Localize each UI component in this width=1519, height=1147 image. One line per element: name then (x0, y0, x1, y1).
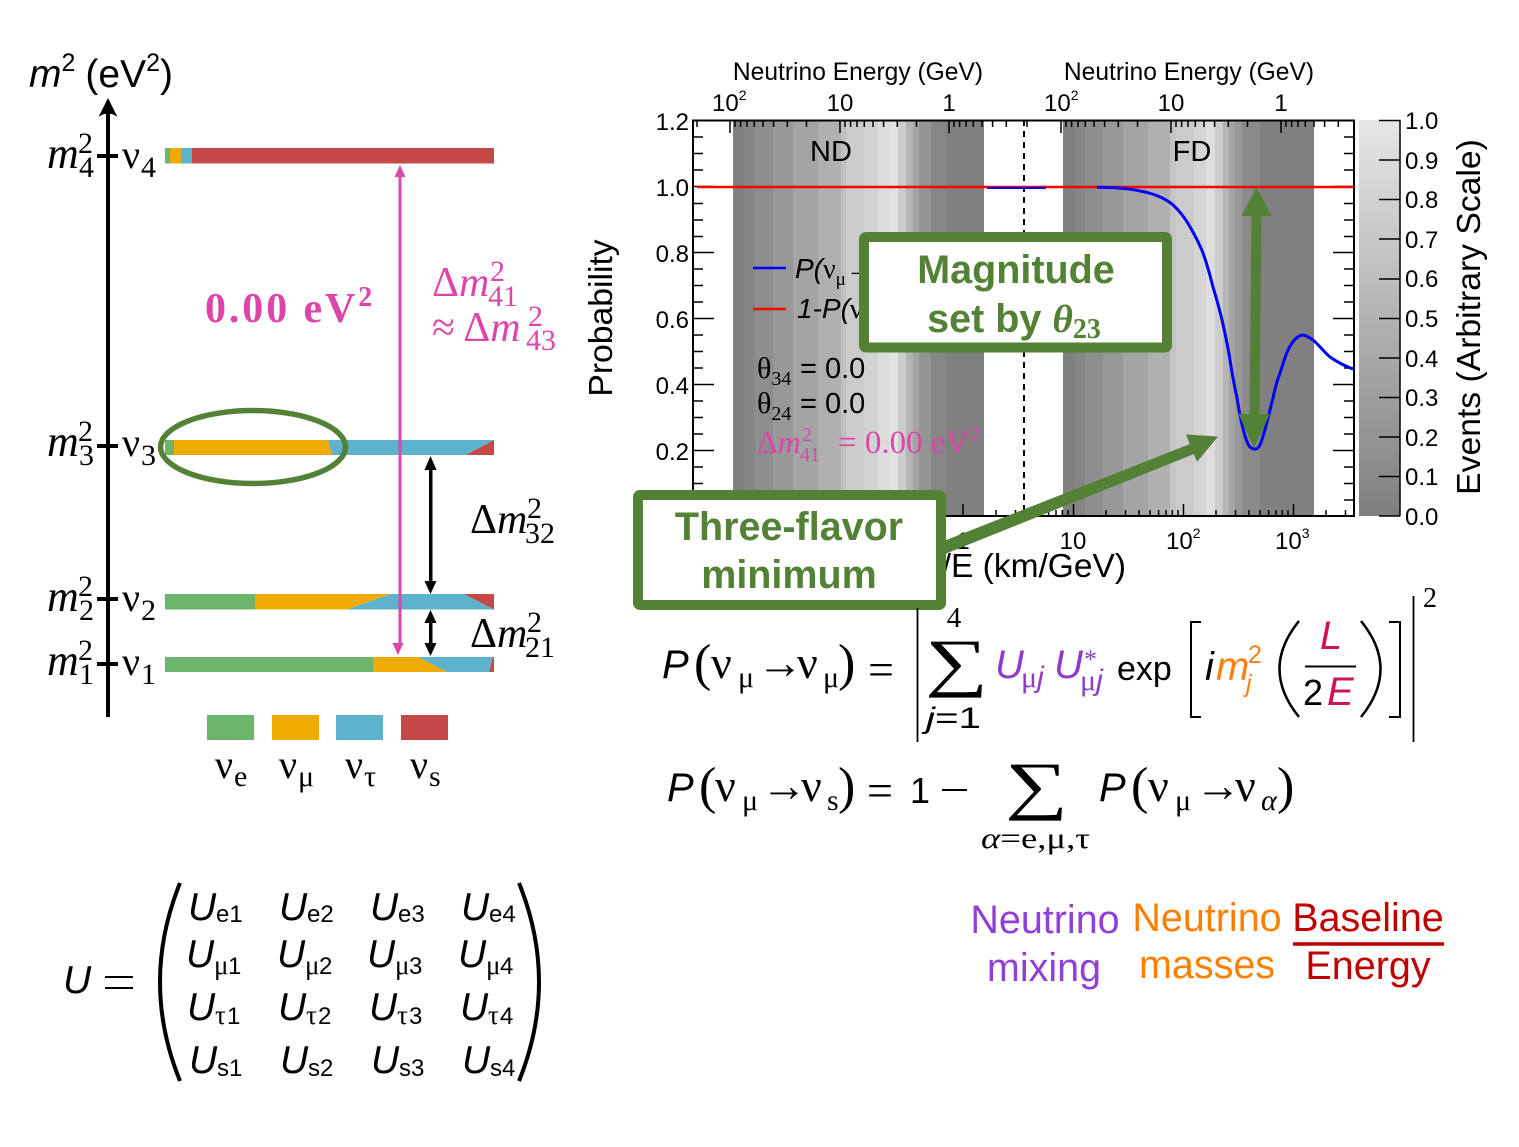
color bar: events arbitrary scale: 0.0 (1405, 504, 1438, 531)
equation: PMNS mixing matrix: U (371, 1039, 400, 1082)
label: dm41 approx dm43: 43 (526, 324, 556, 357)
label: m4 and nu4: 4 (79, 151, 94, 184)
legend: neutrino flavors: e (234, 760, 247, 793)
label: m4 and nu4: 2 (78, 127, 93, 160)
shaded band: FD event spectrum (1063, 120, 1314, 516)
top axis tick labels: 2 (1071, 87, 1079, 103)
equation: muon neutrino survival probability: U (995, 643, 1025, 687)
equation: muon neutrino survival probability: 2 (1248, 641, 1262, 669)
equation: PMNS mixing matrix: U (460, 986, 489, 1029)
detector label: FD: FD (1173, 136, 1211, 168)
legend: neutrino flavors: ν (410, 742, 428, 787)
callout: three-flavor minimum: minimum (701, 553, 877, 597)
parameters text: 24 (771, 403, 791, 425)
equation: sterile appearance probability: ∑ (1005, 749, 1068, 821)
equation: PMNS mixing matrix: 3 (409, 1003, 422, 1030)
highlight ellipse around nu3 muon content (160, 410, 346, 484)
bottom axis tick labels: 2 (1193, 525, 1201, 541)
equation: muon neutrino survival probability: exp (1117, 650, 1172, 688)
parameters text: θ (757, 352, 771, 385)
equation: muon neutrino survival probability: ∑ (925, 626, 988, 698)
equation: sterile appearance probability: ) (838, 758, 855, 815)
equation: PMNS mixing matrix: τ (215, 1000, 226, 1030)
equation: PMNS mixing matrix: e2 (307, 901, 334, 928)
color bar: events arbitrary scale: 0.7 (1405, 227, 1438, 254)
y axis tick labels (656, 109, 689, 466)
equation: sterile appearance probability: ν (715, 760, 736, 811)
color bar: events arbitrary scale: 0.9 (1405, 148, 1438, 175)
y axis tick labels: 0.8 (656, 241, 689, 268)
label: dm41 approx dm43: 2 (528, 300, 543, 333)
equation: PMNS mixing matrix: e4 (489, 901, 516, 928)
label: dm21: Δm (470, 611, 527, 657)
equation: PMNS mixing matrix: s3 (399, 1055, 424, 1082)
label: m3 and nu3: 3 (79, 439, 94, 472)
label: m3 and nu3: 3 (141, 439, 156, 472)
annotation: three-flavor arrow (936, 434, 1218, 556)
top axis tick labels: 10 (712, 90, 739, 117)
color bar: events arbitrary scale: 0.4 (1405, 346, 1438, 373)
label: m1 and nu1: 1 (141, 658, 156, 691)
shaded band: ND event spectrum (733, 120, 984, 516)
line: ND survival blue curve (987, 187, 1046, 189)
equation: PMNS mixing matrix: U (186, 933, 215, 976)
arrow: dm32 (424, 456, 436, 594)
legend: neutrino masses (1132, 896, 1282, 987)
equation: muon neutrino survival probability: L (1320, 614, 1342, 658)
equation: muon neutrino survival probability: 2 (1423, 583, 1437, 614)
equation: PMNS mixing matrix: e3 (398, 901, 425, 928)
y axis tick labels: 1.0 (656, 175, 689, 202)
callout: magnitude set by theta23: Magnitude (917, 248, 1115, 292)
equation: muon neutrino survival probability: μj (1021, 661, 1045, 694)
color bar: events arbitrary scale: 0.6 (1405, 266, 1438, 293)
color bar: events arbitrary scale: 0.8 (1405, 187, 1438, 214)
equation: muon neutrino survival probability: U (1054, 643, 1084, 687)
equation: sterile appearance probability: P (1099, 766, 1126, 810)
legend: neutrino masses: masses (1139, 943, 1275, 987)
color bar title: Events (Arbitrary Scale) (1450, 139, 1488, 495)
equation: sterile appearance probability: ( (699, 758, 716, 815)
equation: sterile appearance probability: ) (1277, 758, 1294, 815)
equation: muon neutrino survival probability: j (1243, 670, 1253, 698)
top axis title: ND energy: Neutrino Energy (GeV) (733, 59, 983, 86)
equation: muon neutrino survival probability: → (757, 637, 803, 688)
legend: baseline over energy: Energy (1305, 944, 1431, 988)
equation: PMNS mixing matrix: 4 (500, 1003, 513, 1030)
label: m3 and nu3: 2 (78, 415, 93, 448)
equation: PMNS mixing matrix: 3 (409, 953, 422, 980)
equation: muon neutrino survival probability: ν (797, 637, 818, 688)
label: dm41 approx dm43: Δm (432, 260, 489, 306)
axis title: m squared in eV squared: 2 (146, 49, 160, 77)
equation: sterile appearance probability: ( (1131, 758, 1148, 815)
arrow: pink mass splitting (392, 165, 406, 655)
equation: sterile appearance probability: ν (1235, 760, 1256, 811)
equation: muon neutrino survival probability: ( (694, 635, 711, 692)
panel: neutrino mass spectrum (29, 49, 556, 793)
equation: PMNS mixing matrix: μ (305, 950, 319, 980)
legend: neutrino mixing: Neutrino (970, 898, 1120, 942)
arrow: dm21 (424, 610, 436, 656)
equation: PMNS mixing matrix: s1 (217, 1055, 242, 1082)
label: dm21: 21 (525, 631, 555, 664)
equation: sterile appearance probability: α=e,μ,τ (981, 822, 1090, 855)
label: dm21 (470, 606, 555, 664)
legend: neutrino flavors: ν (215, 742, 233, 787)
axis title: m squared in eV squared: ) (160, 53, 173, 96)
parameters text (757, 352, 979, 466)
equation: PMNS mixing matrix: τ (397, 1000, 408, 1030)
parameters text: 2 (802, 424, 812, 446)
bar: nu4 flavor content (165, 148, 494, 164)
equation: PMNS mixing matrix: U (461, 886, 490, 929)
callout: magnitude set by theta23: set by θ (927, 297, 1073, 341)
color bar: events arbitrary scale: 0.5 (1405, 306, 1438, 333)
legend: neutrino flavors (207, 715, 448, 793)
bar: nu2 flavor content (165, 594, 494, 610)
top axis title: FD energy: Neutrino Energy (GeV) (1064, 59, 1314, 86)
legend: neutrino flavors: μ (298, 760, 314, 793)
chart legend: →ν (846, 253, 888, 284)
axis title: m squared in eV squared: 2 (62, 49, 75, 77)
legend: baseline over energy (1292, 896, 1444, 988)
equation: muon neutrino survival probability: * (1084, 645, 1097, 674)
equation: PMNS mixing matrix: U (369, 986, 398, 1029)
equation: muon neutrino survival probability: P (662, 643, 689, 687)
equation: PMNS mixing matrix: U (279, 886, 308, 929)
parameters text: 34 (771, 368, 791, 390)
equation: sterile appearance probability: 1 (910, 770, 930, 811)
chart legend (753, 253, 888, 325)
equation: sterile appearance probability: α (1261, 784, 1278, 817)
label: m1 and nu1: 2 (78, 634, 93, 667)
parameters text: 2 (969, 423, 979, 445)
equation: PMNS mixing matrix: 2 (318, 1003, 331, 1030)
equation: muon neutrino survival probability (662, 583, 1437, 742)
color bar: events arbitrary scale: 0.1 (1405, 464, 1438, 491)
top axis tick labels (712, 87, 1288, 117)
label: m2 and nu2 (47, 570, 156, 627)
legend: neutrino flavors: s (429, 760, 441, 793)
parameters text: = 0.00 eV (838, 425, 969, 461)
parameters text: θ (757, 387, 771, 420)
callout: magnitude set by theta23 (864, 237, 1167, 348)
top axis tick labels: 1 (1274, 90, 1288, 117)
x axis title: L/E (km/GeV) (923, 548, 1126, 585)
equation: sterile appearance probability: μ (742, 784, 758, 817)
label: dm21: 2 (527, 606, 542, 639)
equation: PMNS mixing matrix: U (187, 986, 216, 1029)
equation: PMNS mixing matrix: μ (486, 950, 500, 980)
label: m2 and nu2: ν (122, 575, 140, 620)
dashed divider between ND and FD (1023, 120, 1025, 516)
equation: sterile appearance probability: P (667, 766, 694, 810)
parameters text: Δm (757, 424, 801, 460)
label: m2 and nu2: 2 (79, 594, 94, 627)
label: m3 and nu3 (47, 415, 156, 472)
parameters text: 41 (800, 444, 820, 466)
equation: PMNS mixing matrix: 4 (500, 953, 513, 980)
label: m1 and nu1 (47, 634, 156, 691)
equation: PMNS mixing matrix: U (277, 933, 306, 976)
parameters text: = 0.0 (800, 388, 865, 420)
label: m3 and nu3: m (47, 417, 79, 466)
legend: neutrino flavors: ν (279, 742, 297, 787)
equation: sterile appearance probability: → (1195, 760, 1241, 811)
color bar: events arbitrary scale: 1.0 (1405, 108, 1438, 135)
equation: PMNS mixing matrix: U (188, 886, 217, 929)
y axis tick labels: 0.6 (656, 307, 689, 334)
equation: PMNS mixing matrix (63, 883, 539, 1082)
equation: PMNS mixing matrix: U (63, 959, 92, 1002)
equation: muon neutrino survival probability: μ (823, 661, 839, 694)
equation: muon neutrino survival probability: ν (711, 637, 732, 688)
parameters text: = 0.0 (800, 353, 865, 385)
equation: PMNS mixing matrix: U (189, 1039, 218, 1082)
equation: PMNS mixing matrix: s2 (308, 1055, 333, 1082)
detector label: ND: ND (810, 136, 852, 168)
color bar: events arbitrary scale (1359, 108, 1438, 531)
equation: PMNS mixing matrix: 1 (228, 953, 241, 980)
label: m2 and nu2: m (47, 572, 79, 621)
equation: muon neutrino survival probability: μj (1080, 664, 1104, 697)
callout: magnitude set by theta23: 23 (1073, 314, 1101, 345)
bottom axis tick labels: 10 (1060, 528, 1086, 555)
label: m2 and nu2: 2 (78, 570, 93, 603)
legend: neutrino flavors: ν (345, 742, 363, 787)
equation: PMNS mixing matrix: μ (214, 950, 228, 980)
value: 0.00 eV squared: 2 (358, 282, 375, 313)
label: m4 and nu4: ν (122, 132, 140, 177)
equation: sterile appearance probability: = (867, 765, 893, 816)
equation: muon neutrino survival probability: 4 (947, 602, 962, 634)
equation: muon neutrino survival probability: i (1205, 645, 1215, 689)
equation: sterile appearance probability: ν (1148, 760, 1169, 811)
equation: PMNS mixing matrix: U (370, 886, 399, 929)
chart legend: μ (836, 269, 846, 290)
equation: PMNS mixing matrix: U (458, 933, 487, 976)
line: FD survival blue curve (1097, 187, 1353, 449)
bottom axis tick labels: 3 (1302, 525, 1310, 541)
label: m4 and nu4: 4 (141, 151, 156, 184)
legend: baseline over energy: Baseline (1292, 896, 1444, 940)
equation: PMNS mixing matrix: U (280, 1039, 309, 1082)
annotation: magnitude arrow (1238, 187, 1272, 448)
value: 0.00 eV squared: 0.00 eV (205, 286, 358, 332)
equation: sterile appearance probability: → (761, 760, 807, 811)
equation: PMNS mixing matrix: s4 (490, 1055, 515, 1082)
top axis tick labels: 2 (739, 87, 747, 103)
equation: PMNS mixing matrix: U (278, 986, 307, 1029)
equation: PMNS mixing matrix: μ (395, 950, 409, 980)
y axis tick labels: 0.4 (656, 373, 689, 400)
legend: neutrino mixing: mixing (987, 946, 1101, 990)
callout: three-flavor minimum: Three-flavor (675, 505, 903, 549)
label: m2 and nu2: 2 (141, 594, 156, 627)
label: dm32: Δm (470, 497, 527, 543)
top axis tick labels: 1 (942, 90, 956, 117)
chart legend: P(ν (795, 253, 836, 285)
line: 1-P red curve (697, 186, 1354, 188)
label: dm32 (470, 492, 555, 550)
label: m1 and nu1: m (47, 636, 79, 685)
label: dm41 approx dm43: 2 (490, 255, 505, 288)
axis ticks (97, 156, 118, 664)
equation: PMNS mixing matrix: e1 (216, 901, 243, 928)
chart legend: 1-P(ν (797, 293, 863, 325)
bottom axis tick labels (956, 525, 1310, 555)
label: dm32: 32 (525, 517, 555, 550)
y axis tick labels: 1.2 (656, 109, 689, 136)
equation: PMNS mixing matrix: 1 (227, 1003, 240, 1030)
bottom axis tick labels: 1 (956, 528, 970, 555)
top axis tick labels: 10 (1158, 90, 1184, 117)
equation: muon neutrino survival probability: m (1216, 645, 1249, 689)
chart: oscillation probability versus L/E (582, 59, 1488, 585)
legend: neutrino flavors: τ (364, 760, 376, 793)
label: dm41 approx dm43 (432, 255, 556, 357)
label: m1 and nu1: ν (122, 639, 140, 684)
callout: three-flavor minimum (638, 495, 941, 605)
equation: sterile appearance probability: s (827, 784, 839, 817)
bar: nu3 flavor content (165, 440, 494, 455)
axis ticks and frame (693, 120, 1354, 516)
color bar: events arbitrary scale: 0.3 (1405, 385, 1438, 412)
bottom axis tick labels: 10 (1275, 528, 1302, 555)
equation: PMNS mixing matrix: τ (306, 1000, 317, 1030)
arrow: mass axis (98, 98, 118, 717)
legend: neutrino mixing (970, 898, 1120, 990)
axis title: m squared in eV squared: m (29, 53, 62, 96)
legend: neutrino masses: Neutrino (1132, 896, 1282, 940)
equation: muon neutrino survival probability: 2 (1303, 672, 1323, 713)
equation: sterile appearance probability (667, 749, 1294, 855)
color bar: events arbitrary scale: 0.2 (1405, 425, 1438, 452)
equation: PMNS mixing matrix: U (367, 933, 396, 976)
equation: PMNS mixing matrix: 2 (319, 953, 332, 980)
label: m3 and nu3: ν (122, 420, 140, 465)
label: dm32: 2 (527, 492, 542, 525)
bottom axis tick labels: 10 (1166, 528, 1193, 555)
y axis tick labels: 0.2 (656, 439, 689, 466)
equation: muon neutrino survival probability: j=1 (921, 702, 981, 735)
equation: muon neutrino survival probability: E (1327, 670, 1355, 714)
y axis title: Probability (582, 239, 620, 397)
equation: muon neutrino survival probability: μ (738, 661, 754, 694)
bar: nu1 flavor content (165, 657, 494, 672)
equation: sterile appearance probability: ν (801, 760, 822, 811)
label: dm41 approx dm43: 41 (488, 280, 518, 313)
label: m1 and nu1: 1 (79, 658, 94, 691)
top axis tick labels: 10 (827, 90, 853, 117)
equation: muon neutrino survival probability: = (868, 644, 894, 695)
equation: muon neutrino survival probability: ) (838, 635, 855, 692)
label: m4 and nu4 (47, 127, 156, 184)
equation: sterile appearance probability: μ (1175, 784, 1191, 817)
equation: PMNS mixing matrix: τ (488, 1000, 499, 1030)
label: m4 and nu4: m (47, 129, 79, 178)
top axis tick labels: 10 (1044, 90, 1071, 117)
axis title: m squared in eV squared: (eV (85, 53, 146, 96)
label: dm41 approx dm43: ≈ Δm (432, 305, 521, 351)
equation: PMNS mixing matrix: U (462, 1039, 491, 1082)
